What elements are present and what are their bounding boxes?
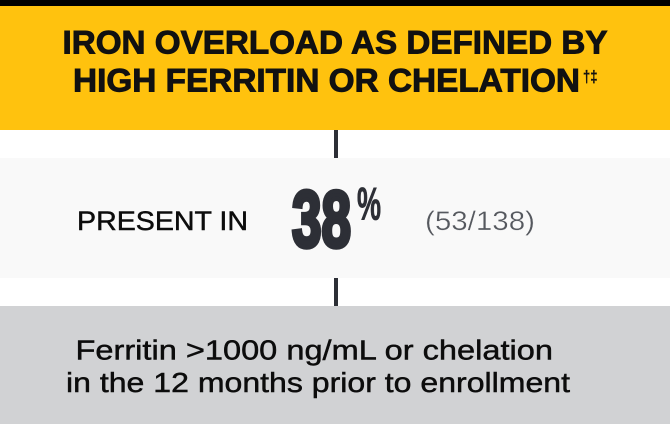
definition line 2: in the 12 months prior to enrollment xyxy=(66,367,570,398)
panel: heading banner xyxy=(0,6,670,130)
statistic: 38 percent: % xyxy=(357,178,381,230)
label: present in: PRESENT IN xyxy=(77,206,248,236)
heading line 1: IRON OVERLOAD AS DEFINED BY xyxy=(62,24,608,60)
panel: definition xyxy=(0,306,670,424)
patient count: (53/138) xyxy=(425,206,535,236)
top black bar xyxy=(0,0,670,6)
connector: heading to result xyxy=(334,130,338,158)
panel: result xyxy=(0,158,670,278)
connector: result to definition xyxy=(334,278,338,306)
statistic: 38 percent: 38 xyxy=(292,174,351,264)
heading line 2: HIGH FERRITIN OR CHELATION xyxy=(73,63,580,99)
definition line 1: Ferritin >1000 ng/mL or chelation xyxy=(76,334,553,366)
footnote marks: †‡ xyxy=(583,67,598,86)
